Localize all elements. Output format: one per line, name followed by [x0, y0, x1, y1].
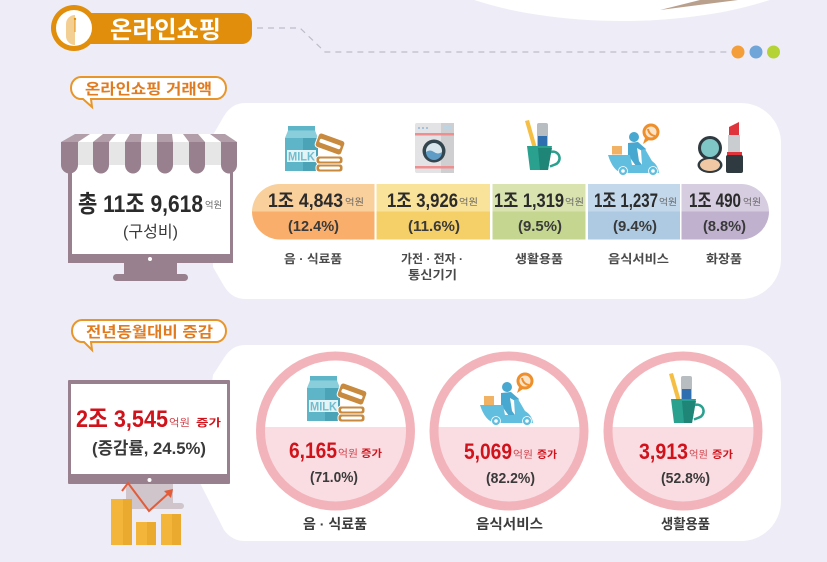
segment: household goods	[492, 184, 586, 240]
panel: year-on-year change	[200, 345, 781, 541]
segment: food	[252, 184, 374, 240]
segment: food: 1조 4,843	[268, 191, 343, 212]
circle: food: 6,165	[289, 438, 337, 463]
store monitor: total: 억원	[205, 199, 222, 210]
category labels: 생활용품	[515, 252, 563, 266]
segment: cosmetics: 1조 490	[689, 191, 741, 212]
icon: toothbrush cup	[525, 120, 560, 170]
category labels: 화장품	[706, 251, 742, 266]
circle: food service: 음식서비스	[476, 516, 543, 532]
monitor: total change	[68, 380, 230, 509]
section heading: online shopping: 온라인쇼핑	[110, 17, 221, 44]
circle: household goods: 증가	[712, 448, 733, 461]
circle: food service: 억원	[513, 449, 533, 461]
circle: food service: (82.2%)	[486, 471, 535, 487]
panel: transaction value	[213, 103, 781, 299]
segment: food service: 억원	[659, 196, 677, 207]
icon: milk and cookies	[307, 376, 368, 422]
circle: household goods: 3,913	[639, 439, 688, 464]
circle: food: 억원	[338, 448, 358, 460]
segment: household goods: 1조 1,319	[494, 191, 564, 212]
circle: food: 증가	[361, 447, 382, 460]
circle: household goods	[608, 356, 758, 532]
circle: household goods: (52.8%)	[661, 471, 710, 487]
segment: household goods: 억원	[565, 196, 584, 207]
icon: milk and cookies	[285, 126, 346, 172]
circle: food	[260, 356, 410, 532]
circle: food service: 5,069	[464, 439, 512, 464]
decorative top white ellipse	[400, 0, 827, 21]
icon: coins with trend arrow	[111, 483, 181, 545]
callout: transaction value	[71, 77, 226, 107]
segment: household goods: (9.5%)	[518, 219, 562, 235]
segment: cosmetics: 억원	[743, 196, 761, 207]
store monitor: total	[61, 134, 237, 281]
icon: milk and cookies: MILK	[288, 152, 316, 164]
segment: cosmetics: (8.8%)	[703, 219, 746, 235]
circle: food: 음 · 식료품	[303, 516, 367, 532]
bar: category shares	[252, 184, 769, 240]
icon: washing machine	[415, 123, 454, 173]
section heading: online shopping	[51, 5, 252, 51]
circle: food service: 증가	[537, 448, 557, 461]
circle: household goods: 억원	[689, 449, 708, 461]
icon: delivery scooter	[480, 372, 534, 426]
segment: cosmetics	[682, 184, 769, 240]
segment: appliances	[376, 184, 490, 240]
monitor: total change: (증감률, 24.5%)	[92, 439, 206, 458]
circle: household goods: 생활용품	[661, 516, 710, 532]
circle: food service	[434, 356, 584, 532]
icon: toothbrush cup	[669, 373, 704, 423]
callout: year-on-year change: 전년동월대비 증감	[86, 324, 213, 341]
monitor: total change: 억원	[169, 417, 190, 429]
monitor: total change: 증가	[196, 416, 221, 429]
segment: food service: (9.4%)	[613, 219, 657, 235]
monitor: total change: 2조 3,545	[76, 406, 168, 433]
icon: milk and cookies: MILK	[310, 402, 338, 414]
segment: appliances: (11.6%)	[408, 219, 460, 235]
dashed connector	[257, 28, 732, 52]
segment: appliances: 억원	[459, 196, 478, 207]
circle: food: (71.0%)	[310, 470, 358, 486]
icon: delivery scooter	[608, 124, 660, 176]
store monitor: total: 총 11조 9,618	[78, 191, 203, 218]
callout: year-on-year change	[72, 320, 226, 350]
segment: appliances: 1조 3,926	[387, 191, 458, 212]
three coloured dots	[732, 46, 780, 58]
callout: transaction value: 온라인쇼핑 거래액	[85, 81, 212, 98]
category labels: 가전 · 전자 ·	[401, 251, 463, 266]
segment: food service	[588, 184, 680, 240]
category labels	[284, 251, 742, 282]
segment: food: 억원	[345, 196, 364, 207]
segment: food service: 1조 1,237	[594, 191, 658, 212]
store monitor: total: (구성비)	[123, 223, 178, 241]
category labels: 통신기기	[408, 267, 457, 282]
segment: food: (12.4%)	[288, 219, 339, 235]
category labels: 음 · 식료품	[284, 252, 342, 266]
category labels: 음식서비스	[608, 252, 669, 266]
icon: cosmetics	[698, 122, 743, 173]
